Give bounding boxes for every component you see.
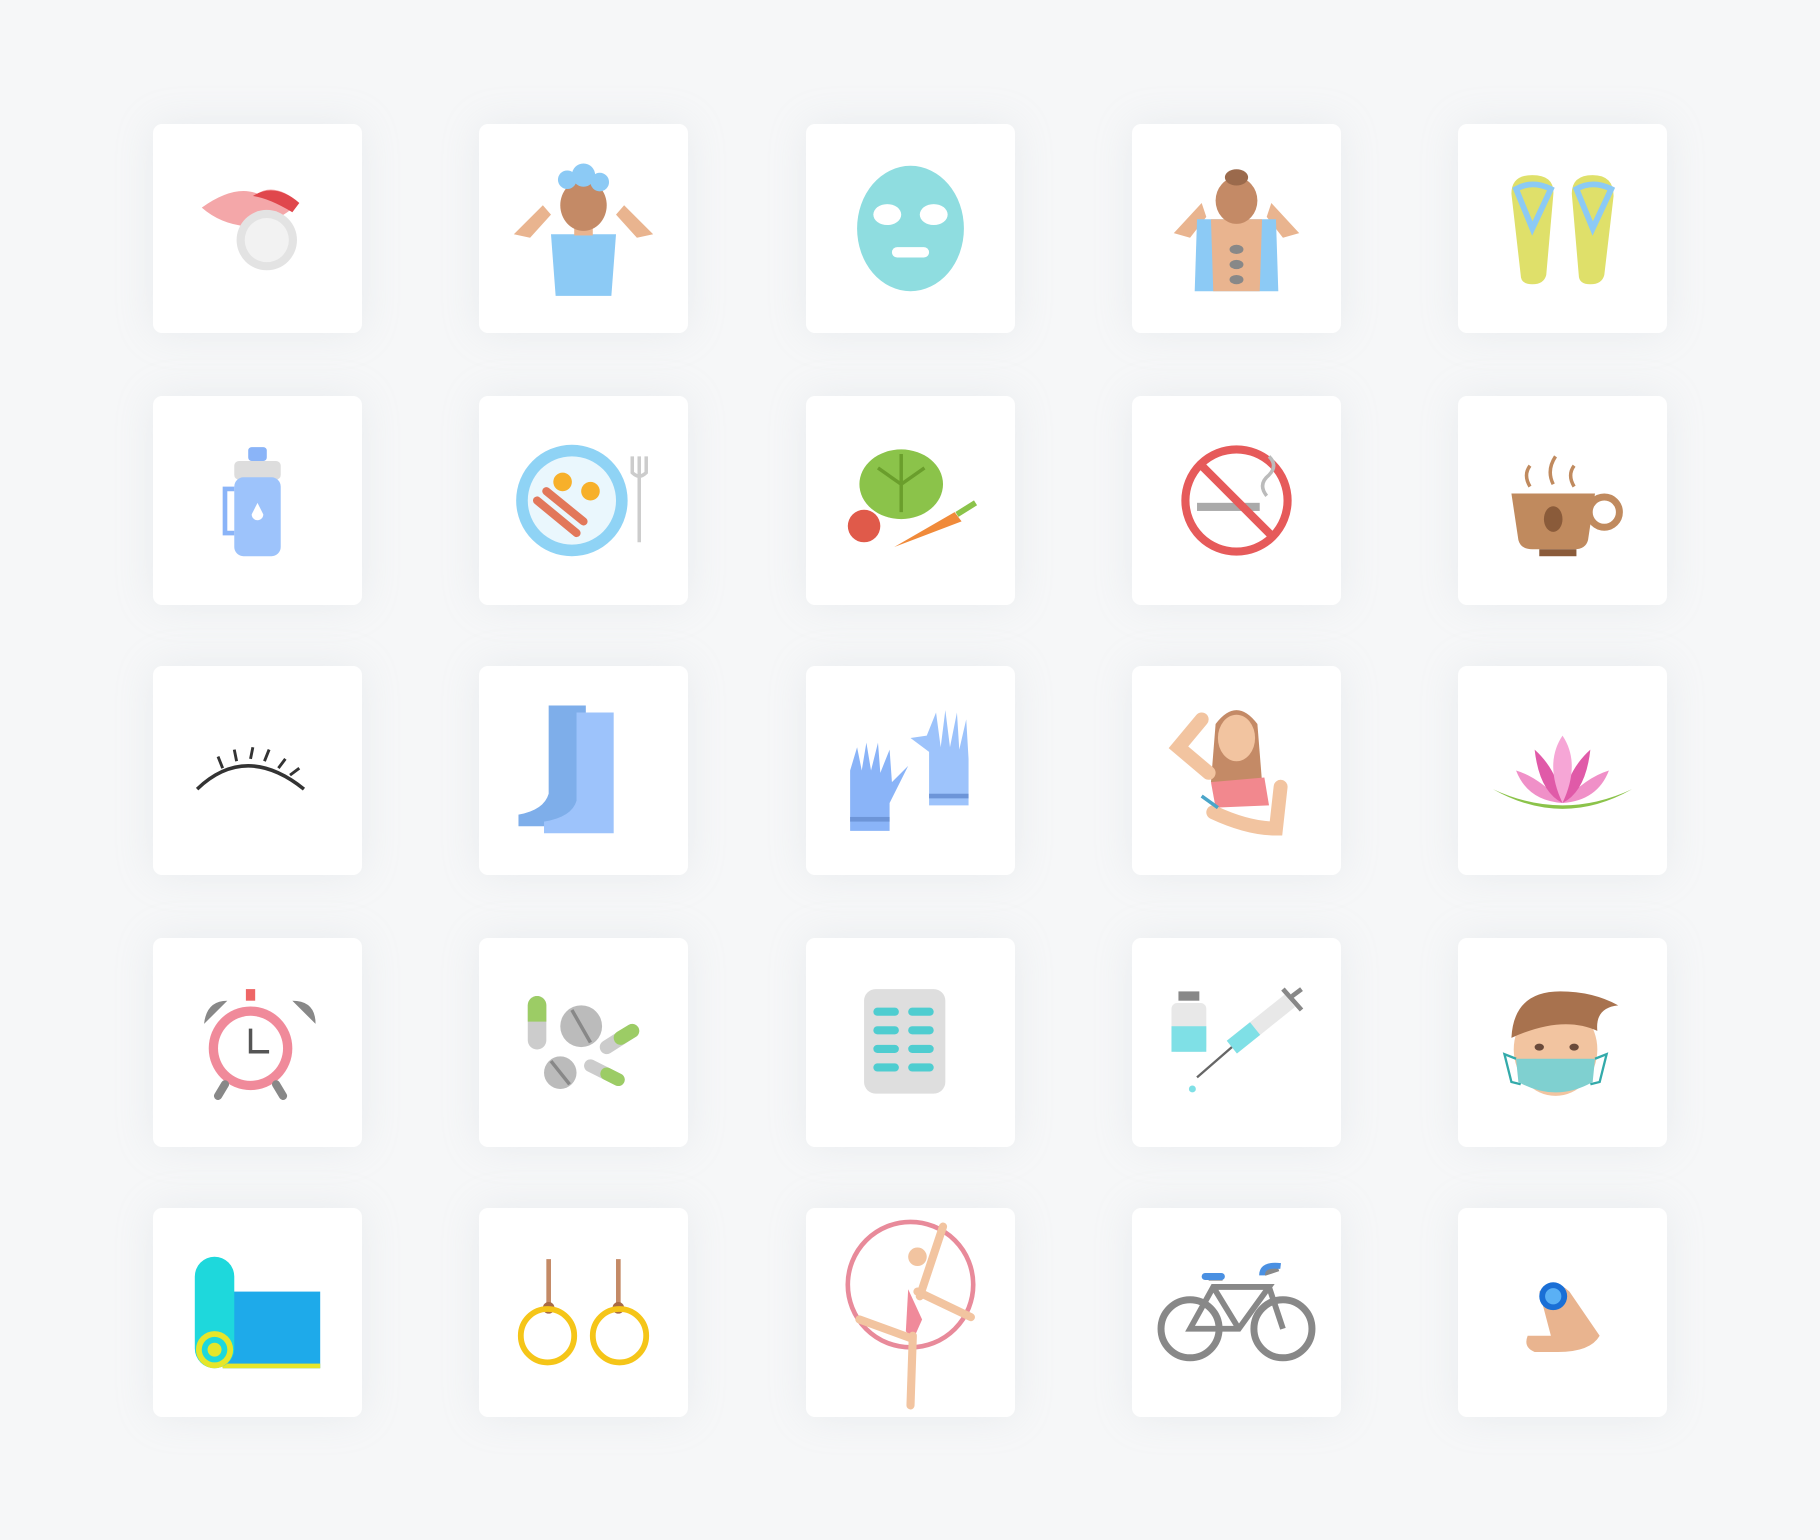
card: rubber boots xyxy=(479,666,688,875)
card: face with mask xyxy=(1458,938,1667,1147)
card: vegetables xyxy=(806,396,1015,605)
card: lotus xyxy=(1458,666,1667,875)
card: bicycle xyxy=(1132,1208,1341,1417)
card: alarm clock xyxy=(153,938,362,1147)
card: lips with cotton pad xyxy=(153,124,362,333)
card: woman shaving xyxy=(1132,666,1341,875)
card: water bottle xyxy=(153,396,362,605)
card: breakfast plate xyxy=(479,396,688,605)
card: eyelash xyxy=(153,666,362,875)
card: vial and syringe xyxy=(1132,938,1341,1147)
card: coffee cup xyxy=(1458,396,1667,605)
card: flip flops xyxy=(1458,124,1667,333)
card: hoop gymnast xyxy=(806,1208,1015,1417)
card: blister pack xyxy=(806,938,1015,1147)
card: face mask xyxy=(806,124,1015,333)
card: flexed arm xyxy=(1458,1208,1667,1417)
card: back massage xyxy=(1132,124,1341,333)
card: yoga mat xyxy=(153,1208,362,1417)
card: pills xyxy=(479,938,688,1147)
card: hair washing xyxy=(479,124,688,333)
card: gloves xyxy=(806,666,1015,875)
card: gymnastic rings xyxy=(479,1208,688,1417)
card: no smoking xyxy=(1132,396,1341,605)
